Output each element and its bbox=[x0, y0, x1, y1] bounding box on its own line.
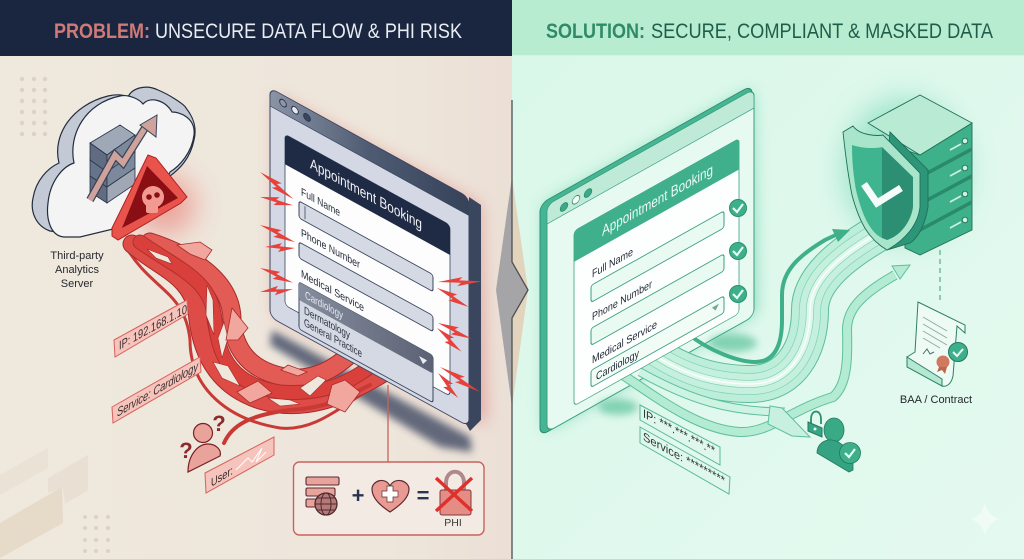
connector: stream to PHI equation bbox=[387, 385, 389, 462]
field: phone number bbox=[591, 237, 724, 345]
field: phone number: Phone Number bbox=[301, 226, 360, 271]
form header: Appointment Booking bbox=[310, 155, 422, 233]
header: problem: UNSECURE DATA FLOW & PHI RISK bbox=[155, 20, 462, 43]
field: full name bbox=[591, 194, 724, 302]
browser window: appointment booking (problem) bbox=[270, 88, 481, 431]
divider: center line and chevron bbox=[496, 100, 528, 559]
icon: heart with cross bbox=[372, 480, 409, 512]
form: appointment booking (solution) bbox=[574, 138, 739, 406]
header: problem bbox=[0, 0, 512, 56]
icon: padlock bbox=[808, 412, 822, 437]
window dots bbox=[560, 187, 592, 213]
icon: unknown user bbox=[179, 411, 226, 472]
decorative dots: top left bbox=[20, 77, 47, 136]
icon: unknown user: ? bbox=[179, 438, 193, 463]
icon: server stack in cloud bbox=[90, 125, 135, 203]
field: medical service dropdown: Dermatology bbox=[304, 303, 350, 342]
connector: server to contract bbox=[939, 250, 941, 302]
panel: PHI equation bbox=[294, 462, 484, 535]
field: full name bbox=[299, 184, 433, 292]
field: full name: Full Name bbox=[592, 244, 633, 281]
icon: third-party analytics cloud bbox=[32, 87, 195, 237]
decorative bars: bottom left bbox=[0, 448, 110, 558]
plus sign: + bbox=[352, 483, 364, 508]
tag: leaked service bbox=[112, 357, 201, 423]
header: problem: PROBLEM: bbox=[54, 20, 150, 43]
icon: server with globe bbox=[306, 477, 339, 515]
shadow: browser window on floor bbox=[270, 330, 472, 452]
header: solution: SOLUTION: bbox=[546, 20, 645, 43]
form header: Appointment Booking bbox=[602, 161, 713, 240]
label: third-party analytics server: Analytics bbox=[55, 264, 100, 276]
equals sign: = bbox=[417, 483, 429, 508]
label: third-party analytics server: Third-party bbox=[50, 250, 104, 262]
window dots bbox=[280, 98, 310, 123]
field: medical service dropdown: Cardiology bbox=[305, 288, 343, 322]
tag: leaked IP bbox=[114, 300, 188, 357]
field: medical service dropdown: Medical Service bbox=[301, 267, 364, 315]
tag: leaked service: Service: Cardiology bbox=[117, 358, 199, 420]
icon: PHI lock crossed out bbox=[436, 472, 472, 529]
data stream: secure green flows bbox=[620, 229, 910, 437]
data stream: leaking red flows bbox=[125, 242, 390, 443]
header: solution bbox=[512, 0, 1024, 55]
icon: rising arrow bbox=[90, 115, 157, 200]
sparks: red attack bolts bbox=[257, 168, 482, 401]
icon: unknown user: ? bbox=[212, 411, 226, 436]
form header bbox=[285, 134, 450, 255]
icon: BAA contract scroll bbox=[907, 302, 968, 386]
icons: check badges bbox=[730, 200, 746, 302]
tag: leaked IP: IP: 192.168.1.10 bbox=[119, 301, 187, 353]
icon: protected user bbox=[817, 418, 860, 472]
field: medical service: Cardiology bbox=[596, 346, 639, 383]
field: full name: Full Name bbox=[301, 185, 340, 219]
glow: green around browser and shield bbox=[545, 90, 967, 430]
form header bbox=[574, 138, 739, 262]
label: third-party analytics server bbox=[50, 250, 104, 290]
field: medical service: Medical Service bbox=[592, 317, 657, 367]
form panel bbox=[285, 134, 450, 396]
icon: shield with check bbox=[843, 126, 928, 250]
panel: solution background bbox=[512, 56, 1024, 559]
field: phone number bbox=[299, 225, 433, 332]
tag: leaked user: User: bbox=[211, 463, 233, 490]
tears in the flow bbox=[147, 249, 326, 406]
field: medical service dropdown bbox=[299, 266, 433, 403]
tag: masked service: Service: ********* bbox=[643, 429, 725, 488]
data stream: soft shadows bbox=[598, 334, 757, 415]
watermark: sparkle bbox=[970, 503, 1000, 536]
label: BAA contract: BAA / Contract bbox=[900, 394, 972, 406]
field: medical service dropdown: General Practice bbox=[304, 315, 362, 361]
tag: leaked user bbox=[205, 437, 274, 493]
icon: PHI lock crossed out: PHI bbox=[444, 517, 462, 529]
icon: server rack bbox=[868, 95, 972, 255]
browser frame: appointment booking (solution) bbox=[540, 84, 754, 436]
panel: problem background bbox=[0, 56, 512, 559]
tag: masked IP: IP: ***.***.***.** bbox=[643, 406, 715, 458]
icon: warning triangle with skull bbox=[112, 155, 187, 240]
torn paper fragments bbox=[177, 242, 360, 412]
label: third-party analytics server: Server bbox=[61, 278, 94, 290]
field: medical service bbox=[591, 280, 724, 387]
glow: red around browser and warning bbox=[135, 95, 486, 425]
field: phone number: Phone Number bbox=[592, 277, 652, 324]
